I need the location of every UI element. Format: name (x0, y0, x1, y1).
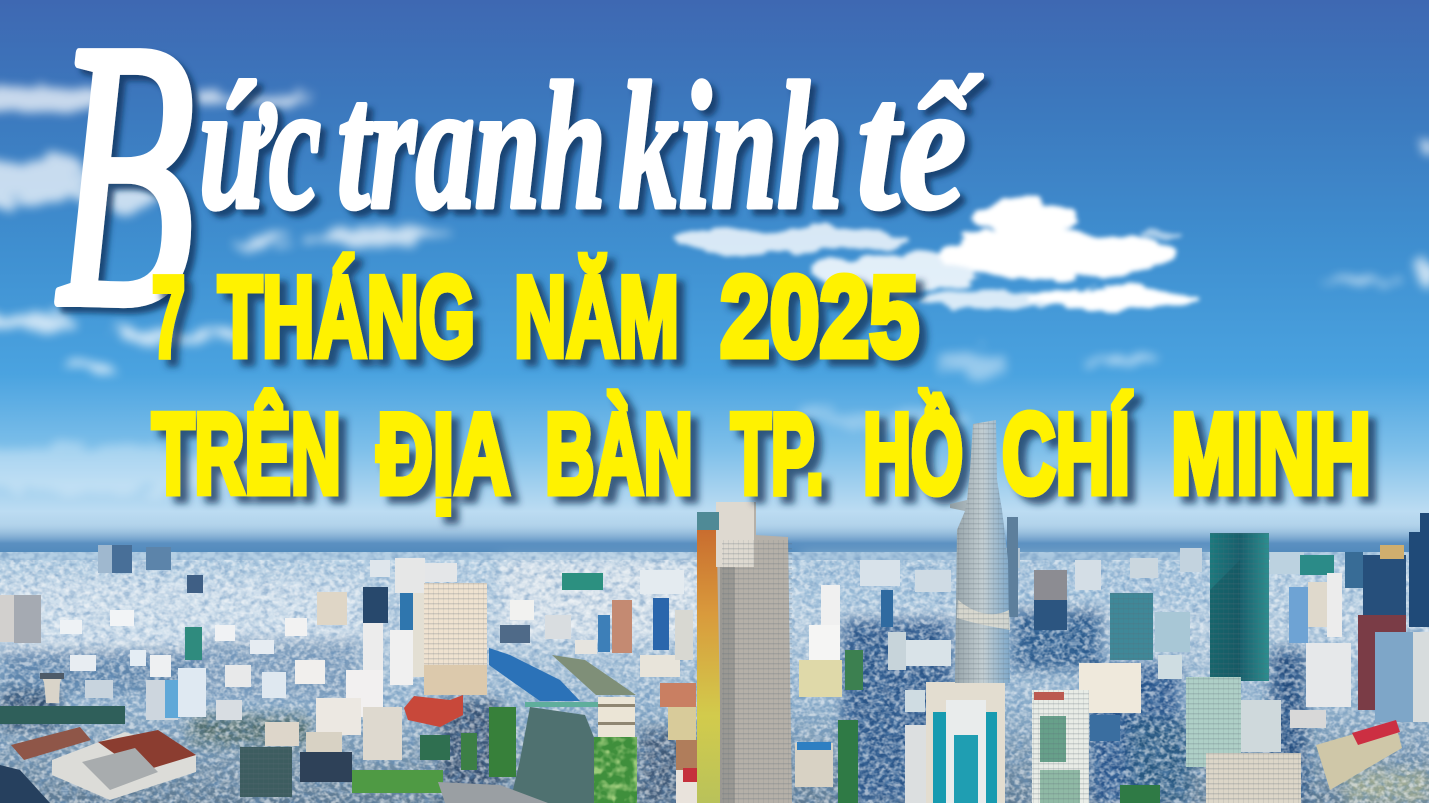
small city blocks (60, 560, 1326, 741)
city base haze (0, 552, 1429, 803)
cream apartment tower (424, 583, 487, 695)
subtitle: trên địa bàn TP. Hồ Chí Minh: TRÊN (152, 391, 341, 518)
horizon band (0, 529, 1420, 552)
riverside greenery and roads (0, 650, 1160, 803)
Bitexco tower (950, 420, 1018, 683)
title script: Bức tranh kinh tế: ức (199, 46, 321, 247)
title script: Bức tranh kinh tế (55, 0, 983, 384)
left mid-rise towers (0, 587, 424, 760)
tonal patches (0, 555, 1429, 803)
tree texture (594, 737, 637, 803)
subtitle: 7 tháng năm 2025: THÁNG (218, 254, 475, 381)
warehouse (0, 727, 196, 803)
distant towers (98, 545, 1363, 593)
subtitle: trên địa bàn TP. Hồ Chí Minh: CHÍ (1002, 391, 1132, 518)
teal glass tower (1210, 533, 1269, 681)
subtitle: 7 tháng năm 2025: 2025 (720, 254, 919, 381)
construction tower with orange cladding (697, 502, 792, 803)
canal (489, 648, 636, 803)
subtitle: 7 tháng năm 2025: 7 (152, 254, 185, 381)
teal-glazed bank tower (926, 682, 1005, 803)
subtitle: trên địa bàn TP. Hồ Chí Minh: HỒ (863, 391, 963, 518)
green-white office tower (1032, 690, 1089, 803)
city skyline photo (0, 502, 1429, 803)
speckled rooftops (0, 552, 1429, 803)
subtitle: trên địa bàn TP. Hồ Chí Minh: ĐỊA (377, 391, 510, 518)
subtitle: 7 tháng năm 2025: NĂM (514, 254, 679, 381)
subtitle: trên địa bàn TP. Hồ Chí Minh: TP. (731, 391, 824, 518)
right downtown blocks (1186, 513, 1429, 803)
sky background (0, 0, 1429, 550)
mid-rise buildings by the canal (404, 598, 698, 803)
subtitle: trên địa bàn TP. Hồ Chí Minh: BÀN (545, 391, 693, 518)
subtitle: 7 tháng năm 2025 (152, 254, 919, 381)
title script: Bức tranh kinh tế: tế (857, 46, 983, 247)
subtitle: trên địa bàn TP. Hồ Chí Minh (152, 391, 1371, 518)
mid-rises around Bitexco (795, 570, 1190, 803)
dark office block (240, 747, 292, 797)
title script: Bức tranh kinh tế: kinh (619, 46, 843, 247)
title script: Bức tranh kinh tế: tranh (337, 46, 606, 247)
clouds (0, 86, 1429, 494)
